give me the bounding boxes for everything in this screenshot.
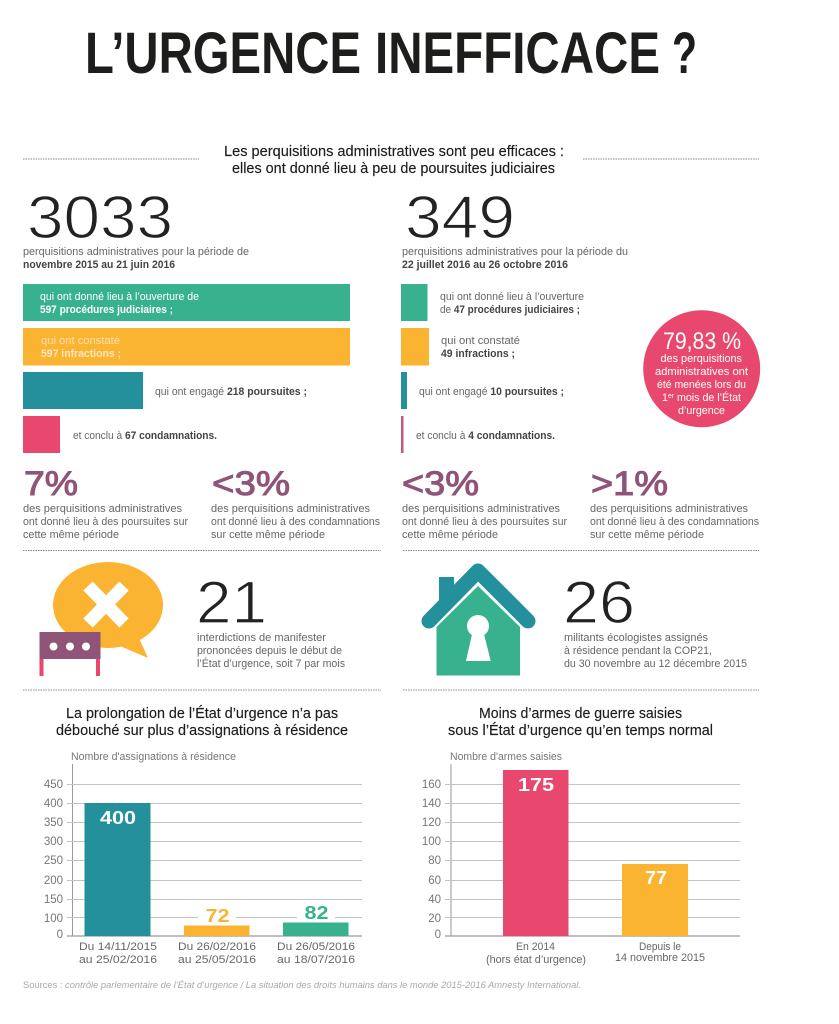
stat: <3% poursuites: des perquisitions administratives (402, 503, 560, 515)
section heading: elles ont donné lieu à peu de poursuites judiciaires (232, 160, 555, 177)
stat: >1%: >1% (591, 465, 668, 503)
bar 82 (283, 903, 348, 936)
bar chart: armes saisies: 120 (422, 817, 441, 829)
stat: <3% condamnations: sur cette même période (211, 529, 325, 541)
stat: <3% condamnations (211, 465, 380, 541)
stat: 7%: ont donné lieu à des poursuites sur (23, 516, 188, 528)
bar chart: assignations à résidence: 300 (44, 836, 63, 848)
bar chart: armes saisies: Nombre d'armes saisies (450, 751, 562, 763)
bar chart: armes saisies: 160 (422, 779, 441, 791)
stat: >1%: des perquisitions administratives (590, 503, 748, 515)
bar chart: assignations à résidence: 150 (44, 894, 63, 906)
bar: procédures: qui ont donné lieu à l’ouverture (440, 291, 584, 303)
stat: <3% poursuites: <3% (402, 465, 479, 503)
bar 400 (84, 803, 150, 936)
stat: >1% (590, 465, 759, 541)
stat: 21 interdictions (196, 569, 345, 670)
bar chart: armes saisies: 0 (435, 929, 441, 941)
callout circle 79,83 %: 79,83 % (663, 328, 741, 355)
bar chart: armes saisies: Depuis le (639, 941, 681, 953)
callout circle 79,83 %: d’urgence (678, 405, 725, 417)
stat: >1%: ont donné lieu à des condamnations (590, 516, 759, 528)
bar: condamnations: et conclu à 4 condamnations. (416, 430, 555, 442)
bar chart: armes saisies: 100 (422, 836, 441, 848)
callout circle 79,83 %: été menées lors du (657, 379, 746, 391)
stat: 7% (23, 465, 188, 541)
stat: 7%: des perquisitions administratives (23, 503, 182, 515)
stat: <3% condamnations: <3% (212, 465, 290, 503)
big number 349: 349 (405, 184, 515, 251)
bar 82: 82 (304, 903, 328, 923)
bar 400: 400 (100, 808, 136, 828)
title: INEFFICACE (375, 21, 660, 86)
bar chart: assignations à résidence: Du 26/05/2016 (277, 941, 355, 953)
bar 72 (184, 906, 250, 936)
bar: infractions: 49 infractions ; (441, 348, 515, 360)
callout circle 79,83 %: er (668, 393, 675, 400)
bar chart: assignations à résidence: au 25/02/2016 (79, 954, 157, 966)
heading: left chart: débouché sur plus d’assignations à résidence (56, 722, 348, 739)
stat: 26 militants: du 30 novembre au 12 décembre 2015 (564, 658, 747, 670)
bar: procédures: de 47 procédures judiciaires ; (440, 304, 580, 316)
callout circle 79,83 %: administratives ont (655, 366, 748, 378)
bar chart: armes saisies: (hors état d’urgence) (486, 954, 586, 966)
bar chart: assignations à résidence: Du 26/02/2016 (178, 941, 256, 953)
stat: 21 interdictions: prononcées depuis le début de (197, 645, 342, 657)
stat: 21 interdictions: interdictions de manifester (197, 632, 326, 644)
stat: <3% poursuites: ont donné lieu à des poursuites sur (402, 516, 567, 528)
period text: perquisitions administratives pour la période du (402, 246, 628, 258)
stat: >1%: sur cette même période (590, 529, 704, 541)
stat: 7%: cette même période (23, 529, 119, 541)
bar: poursuites: qui ont engagé 218 poursuites ; (155, 386, 307, 398)
sources: Sources : contrôle parlementaire de l’État d’urgence / La situation des droits humains dans le monde 2015-2016 Amnesty International. (23, 980, 581, 990)
bar chart: assignations à résidence: 250 (44, 855, 63, 867)
heading: right chart (448, 705, 713, 739)
bar: infractions: qui ont constaté (441, 335, 520, 347)
heading: right chart: sous l’État d’urgence qu’en temps normal (448, 722, 713, 739)
callout circle 79,83 %: 1 (662, 392, 668, 404)
stat: 21 interdictions: 21 (196, 569, 267, 636)
title (85, 21, 697, 86)
stat: 7%: 7% (24, 465, 78, 503)
bar chart: armes saisies: 14 novembre 2015 (615, 952, 705, 964)
bar: procédures (401, 284, 584, 321)
bar 175: 175 (518, 775, 554, 795)
heading: right chart: Moins d’armes de guerre saisies (479, 705, 682, 722)
bar chart: armes saisies: 40 (428, 894, 441, 906)
bar chart: armes saisies: 80 (428, 855, 441, 867)
bar chart: assignations à résidence: au 25/05/2016 (178, 954, 256, 966)
bar: poursuites: qui ont engagé 10 poursuites ; (419, 386, 564, 398)
panel: first period (23, 184, 350, 453)
bar: infractions: qui ont constaté (41, 335, 120, 347)
icon: speech bubble with cross and sign (40, 562, 163, 676)
period text: perquisitions administratives pour la période de (23, 246, 249, 258)
panel: second period (401, 184, 760, 453)
bar 175 (503, 770, 568, 936)
bar chart: assignations à résidence: 200 (44, 875, 63, 887)
period text (402, 246, 628, 271)
bar 77 (622, 864, 688, 936)
callout circle 79,83 %: mois de l’État (674, 391, 741, 404)
stat: <3% condamnations: ont donné lieu à des condamnations (211, 516, 380, 528)
bar chart: assignations à résidence: 350 (44, 817, 63, 829)
heading: left chart (56, 705, 348, 739)
bar: poursuites (23, 372, 307, 409)
section heading: Les perquisitions administratives sont peu efficaces : (224, 143, 564, 160)
bar 72: 72 (206, 906, 230, 926)
bar 77: 77 (645, 868, 667, 888)
bar: infractions (401, 328, 520, 366)
stat: <3% poursuites (402, 465, 567, 541)
stat: 21 interdictions: l’État d’urgence, soit 7 par mois (197, 657, 345, 670)
bar: procédures (23, 284, 350, 321)
stat: 26 militants: à résidence pendant la COP21, (564, 645, 712, 657)
title: ? (672, 21, 697, 86)
period text (23, 246, 249, 271)
bar: infractions: 597 infractions ; (41, 348, 121, 360)
bar chart: assignations à résidence: 450 (44, 779, 63, 791)
title: L’URGENCE (85, 21, 361, 86)
section heading (23, 143, 759, 177)
stat: 26 militants: militants écologistes assignés (564, 632, 708, 644)
bar chart: armes saisies: 140 (422, 798, 441, 810)
bar chart: assignations à résidence: 400 (44, 798, 63, 810)
bar: condamnations: et conclu à 67 condamnations. (73, 430, 217, 442)
heading: left chart: La prolongation de l’État d’urgence n’a pas (66, 705, 338, 722)
bar chart: armes saisies: 20 (428, 913, 441, 925)
bar chart: assignations à résidence (44, 751, 362, 966)
bar: condamnations (23, 416, 217, 453)
bar chart: assignations à résidence: au 18/07/2016 (277, 954, 355, 966)
bar chart: armes saisies: En 2014 (516, 941, 555, 953)
bar chart: assignations à résidence: 0 (57, 929, 63, 941)
stat: <3% condamnations: des perquisitions administratives (211, 503, 370, 515)
period text: 22 juillet 2016 au 26 octobre 2016 (402, 259, 568, 271)
bar: infractions (23, 328, 350, 366)
bar chart: armes saisies: 60 (428, 875, 441, 887)
callout circle 79,83 % (643, 310, 760, 427)
big number 3033: 3033 (27, 184, 173, 251)
bar chart: assignations à résidence: 100 (44, 913, 63, 925)
icon: house with keyhole (429, 571, 528, 676)
bar chart: armes saisies (422, 751, 740, 966)
bar chart: assignations à résidence: Nombre d'assignations à résidence (71, 751, 236, 763)
stat: 26 militants: 26 (563, 569, 635, 636)
period text: novembre 2015 au 21 juin 2016 (23, 259, 175, 271)
stat: <3% poursuites: cette même période (402, 529, 498, 541)
callout circle 79,83 %: des perquisitions (660, 353, 742, 365)
bar: procédures: qui ont donné lieu à l’ouverture de (40, 291, 199, 303)
bar chart: assignations à résidence: Du 14/11/2015 (79, 941, 157, 953)
stat: 26 militants (563, 569, 747, 670)
bar: procédures: 597 procédures judiciaires ; (40, 304, 173, 316)
bar: poursuites (401, 372, 564, 409)
